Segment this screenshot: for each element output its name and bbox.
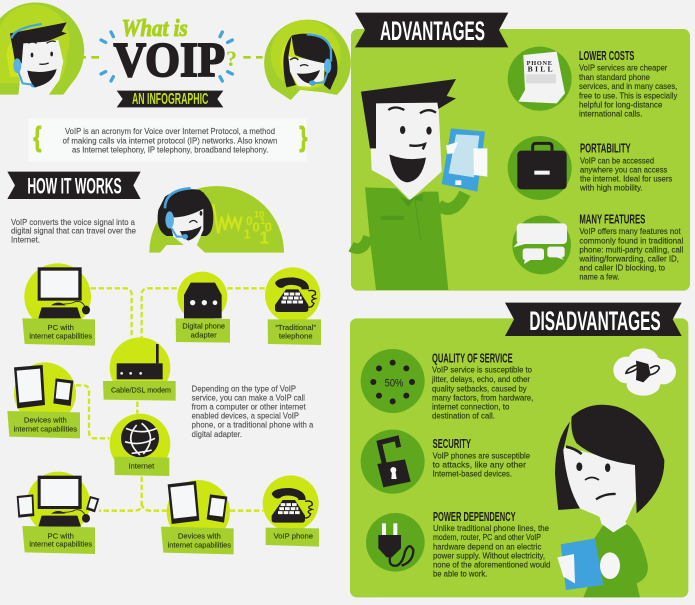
node: traditional telephone: telephone — [279, 332, 312, 341]
thought cloud with broken teapot — [613, 348, 676, 396]
icon: phone bill — [508, 47, 572, 111]
illustration: woman converting voice to digital: 10 — [254, 209, 264, 219]
intro text block: { — [33, 121, 41, 152]
intro text block: of making calls via internet protocol (IP) networks. Also known — [63, 135, 278, 145]
icon: speech bubbles — [512, 216, 571, 274]
explanation text — [192, 384, 314, 439]
illustration: woman converting voice to digital — [149, 186, 284, 253]
ribbon: how it works: HOW IT WORKS — [27, 173, 122, 198]
text: quality of service: many factors, from hardware, — [432, 392, 533, 402]
text: quality of service — [431, 351, 533, 420]
node: digital phone adapter — [176, 272, 230, 343]
node: internet: Internet — [128, 461, 155, 470]
text: many features: MANY FEATURES — [579, 212, 645, 226]
header section — [0, 2, 351, 253]
title: What is: What is — [122, 16, 188, 42]
text: quality of service: VoIP service is susceptible to — [432, 365, 532, 375]
node: PC: PC with — [47, 323, 74, 332]
illustration: woman converting voice to digital: 1 — [260, 216, 265, 226]
panel: disadvantages — [350, 303, 688, 597]
icon: phone bill: PHONE — [527, 60, 552, 67]
icon: 50 percent loader: 50% — [385, 378, 403, 390]
text: portability: VoIP can be accessed — [580, 155, 654, 165]
node: VoIP phone: VoIP phone — [274, 531, 313, 540]
node: PC with devices — [17, 472, 99, 554]
text: security: VoIP phones are susceptible — [433, 450, 530, 460]
illustration: woman converting voice to digital: 1 — [243, 226, 251, 241]
text: lower costs: international calls. — [579, 108, 642, 118]
text: lower costs: than standard phone — [579, 72, 650, 82]
explanation text: enabled devices, a special VoIP — [192, 411, 299, 421]
text: many features: and caller ID blocking, to — [579, 263, 665, 273]
dashed connectors — [76, 288, 265, 511]
text: quality of service: jitter, delays, echo, and other — [431, 374, 530, 384]
explanation text: Depending on the type of VoIP — [192, 384, 296, 394]
text: power dependency: hardware depend on an electric — [433, 541, 541, 551]
node: cable/DSL modem — [103, 337, 176, 401]
connector dashes — [81, 53, 263, 61]
node: devices: internet capabilities — [14, 424, 77, 433]
text: many features: name a few. — [579, 272, 619, 282]
text: lower costs: services, and in many cases, — [579, 81, 677, 91]
icon: open padlock — [361, 430, 425, 494]
text: power dependency: power supply. Without electricity, — [433, 550, 545, 560]
node: VoIP phone — [263, 475, 319, 547]
node: traditional telephone: “Traditional” — [275, 323, 316, 332]
text: portability: PORTABILITY — [580, 142, 631, 156]
text: portability: with high mobility. — [579, 183, 643, 193]
ribbon: advantages: ADVANTAGES — [380, 16, 485, 46]
icon: briefcase — [508, 136, 572, 200]
node: devices bottom: internet capabilities — [168, 540, 231, 549]
how it works text: VoIP converts the voice signal into a — [11, 217, 135, 227]
intro text block: } — [299, 121, 307, 152]
avatar: man with headset — [0, 2, 84, 95]
illustration: frowning woman with tablet — [555, 405, 664, 597]
intro text block: as Internet telephony, IP telephony, broadband telephony. — [72, 144, 268, 154]
icon: phone bill: BILL — [528, 64, 553, 73]
node: PC with devices: internet capabilities — [29, 540, 92, 549]
text: many features: VoIP offers many features not — [579, 226, 681, 236]
node: PC: internet capabilities — [29, 332, 92, 341]
illustration: woman converting voice to digital: 0 — [252, 220, 260, 235]
text: lower costs: free to use. This is especially — [579, 90, 678, 100]
ribbon: advantages — [355, 13, 508, 47]
how it works text — [11, 217, 136, 245]
text: security — [433, 437, 530, 479]
ribbon: an infographic — [117, 91, 223, 108]
panel: advantages — [351, 13, 690, 291]
how it works network diagram — [7, 263, 321, 554]
node: devices: Devices with — [24, 416, 67, 425]
text: many features: waiting/forwarding, caller ID, — [578, 254, 679, 264]
avatar: woman with headset — [264, 20, 351, 100]
text: portability: anywhere you can access — [580, 164, 667, 174]
node: devices — [7, 362, 80, 438]
text: lower costs: LOWER COSTS — [579, 49, 634, 63]
text: lower costs: helpful for long-distance — [579, 99, 663, 109]
intro text block — [28, 118, 307, 162]
text: power dependency: Unlike traditional phone lines, the — [433, 523, 549, 533]
text: power dependency: modem, router, PC and other VoIP — [433, 532, 541, 542]
icon: 50 percent loader — [361, 349, 425, 413]
node: devices bottom: Devices with — [178, 532, 221, 541]
icon: power plug — [366, 513, 425, 572]
explanation text: from a computer or other internet — [192, 402, 306, 412]
intro text block: VoIP is an acronym for Voice over Internet Protocol, a method — [65, 126, 275, 136]
text: many features: phone: multi-party calling, call — [579, 244, 683, 254]
text: power dependency — [433, 510, 551, 579]
illustration: woman converting voice to digital: 0 — [265, 220, 272, 235]
title: VOIP: VOIP — [114, 33, 225, 87]
text: power dependency: none of the aforementioned would — [433, 560, 551, 570]
explanation text: service, you can make a VoIP call — [192, 393, 305, 403]
node: PC — [22, 263, 95, 346]
text: security: Internet-based devices. — [433, 469, 512, 479]
text: lower costs — [579, 49, 678, 118]
text: portability: the internet. Ideal for users — [580, 173, 672, 183]
explanation text: digital adapter. — [192, 429, 242, 439]
how it works text: Internet. — [11, 235, 40, 245]
node: PC with devices: PC with — [47, 531, 74, 540]
ribbon: an infographic: AN INFOGRAPHIC — [132, 91, 208, 108]
node: internet — [110, 414, 170, 476]
how it works text: digital signal that can travel over the — [11, 226, 136, 236]
text: quality of service: QUALITY OF SERVICE — [432, 351, 513, 365]
text: security: to attacks, like any other — [433, 459, 526, 469]
text: quality of service: quality setbacks, caused by — [432, 383, 527, 393]
illustration: woman converting voice to digital: 0 — [246, 214, 253, 228]
text: security: SECURITY — [433, 437, 471, 451]
text: quality of service: internet connection, to — [432, 401, 510, 411]
text: lower costs: VoIP services are cheaper — [579, 63, 668, 73]
title question mark: ? — [226, 46, 237, 71]
node: cable/DSL modem: Cable/DSL modem — [111, 386, 171, 395]
text: power dependency: be able to work. — [433, 569, 487, 579]
text: power dependency: POWER DEPENDENCY — [433, 510, 516, 524]
node: traditional telephone — [265, 267, 321, 345]
illustration: woman converting voice to digital: 1 — [259, 227, 269, 247]
node: digital phone adapter: adapter — [191, 330, 217, 339]
ribbon: how it works — [7, 172, 141, 199]
explanation text: phone, or a traditional phone with a — [192, 420, 314, 430]
text: portability — [579, 142, 672, 193]
node: digital phone adapter: Digital phone — [182, 322, 225, 331]
blue rays — [101, 32, 232, 81]
text: many features: commonly found in traditional — [579, 235, 683, 245]
text: many features — [578, 212, 683, 282]
illustration: happy man on phone — [351, 79, 487, 290]
node: devices bottom — [161, 480, 234, 554]
text: quality of service: destination of call. — [432, 410, 495, 420]
